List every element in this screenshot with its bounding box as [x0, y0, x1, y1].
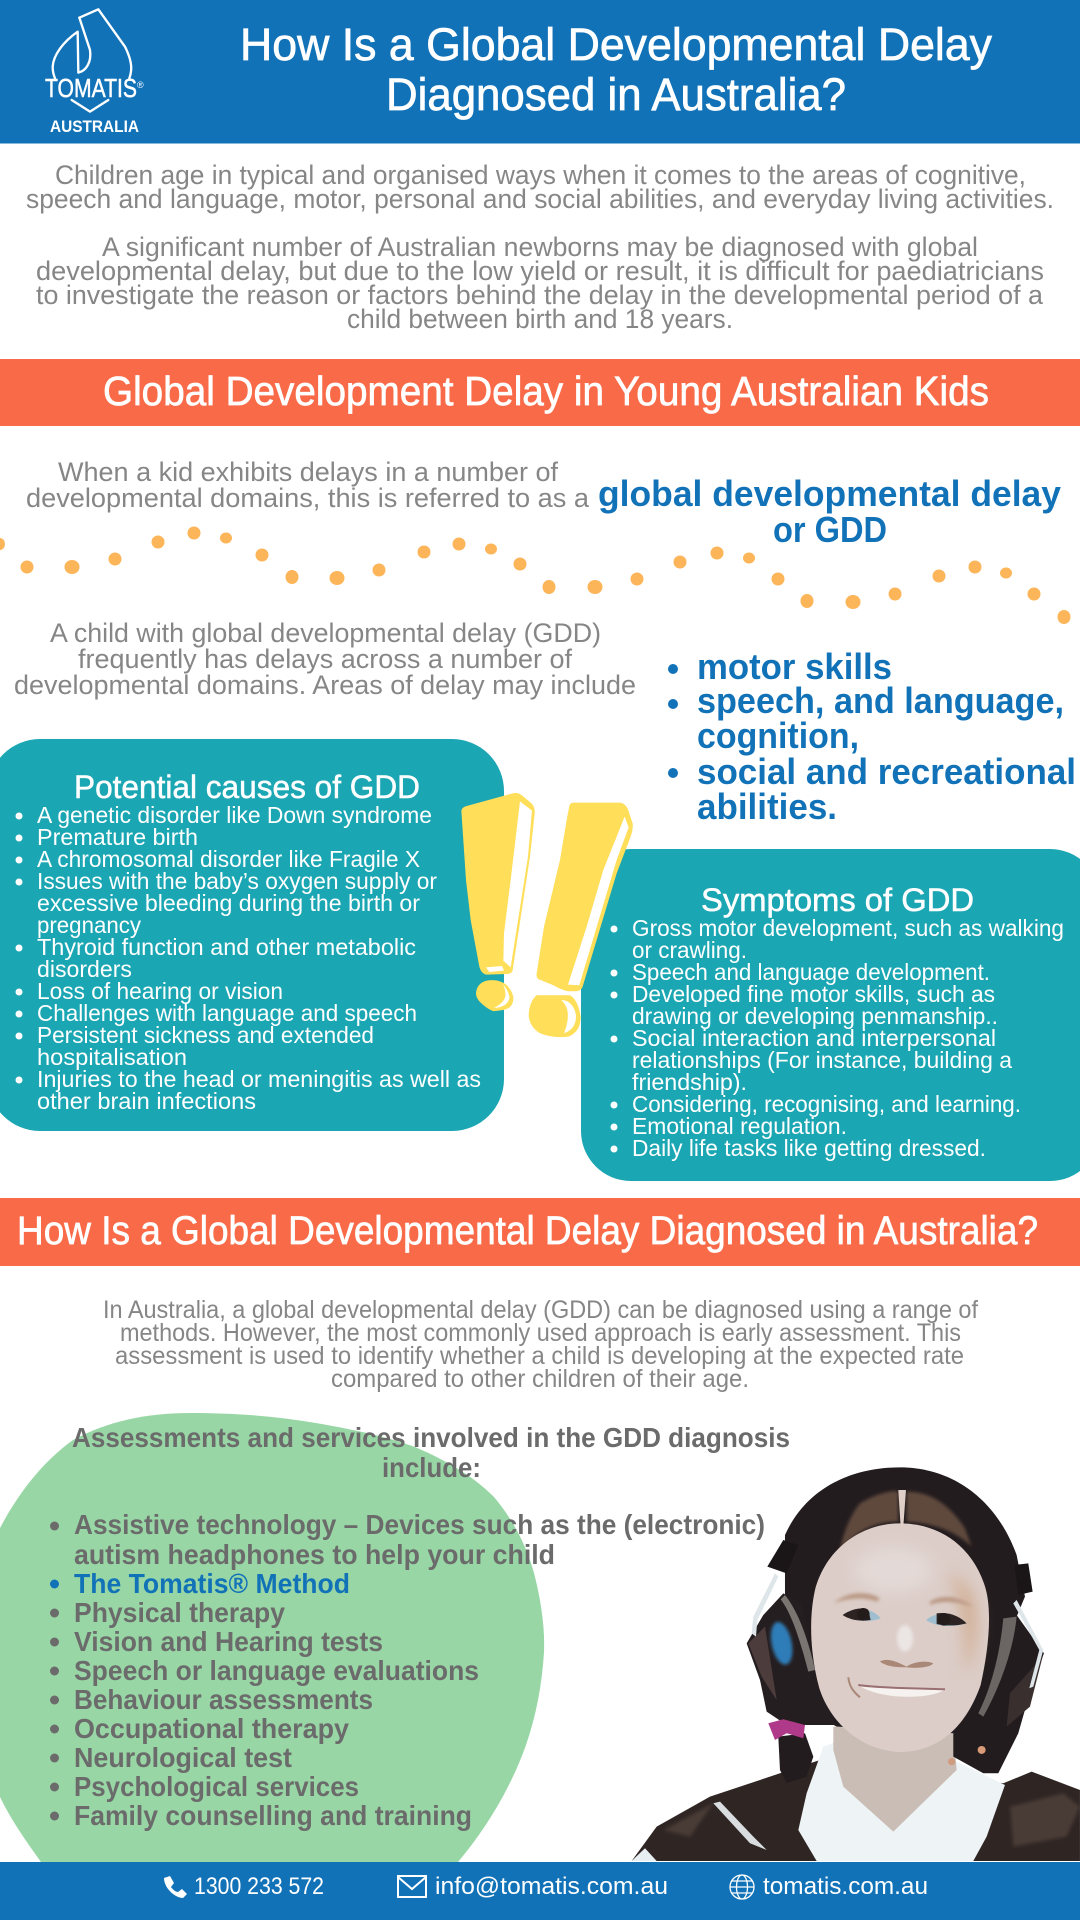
intro paragraph 2: developmental delay, but due to the low yield or result, it is difficult for paediatricians: [36, 256, 1044, 286]
face: [811, 1523, 989, 1752]
hair parting: [898, 1490, 906, 1527]
icon: double exclamation marks: [461, 790, 633, 1050]
text: diagnosis paragraph: methods. However, the most commonly used approach is early assessment. This: [120, 1319, 961, 1347]
header band: [0, 0, 1080, 144]
panel: symptoms of GDD: [581, 849, 1080, 1181]
list: symptoms: Social interaction and interpersonal: [632, 1025, 996, 1051]
icon: globe: [730, 1875, 754, 1899]
list: causes: Thyroid function and other metabolic: [37, 934, 416, 960]
list: assessments: Neurological test: [74, 1742, 292, 1773]
list: symptoms: Gross motor development, such as walking: [632, 915, 1064, 941]
list: causes: A chromosomal disorder like Fragile X: [37, 846, 420, 872]
right eye: [926, 1614, 967, 1626]
list: symptoms: [610, 915, 1064, 1161]
neck: [833, 1727, 957, 1832]
list: assessments: Assistive technology – Devices such as the (electronic): [74, 1509, 765, 1540]
heading: symptoms: Symptoms of GDD: [701, 882, 974, 918]
list: symptoms: friendship).: [632, 1069, 747, 1095]
list: causes: hospitalisation: [37, 1044, 187, 1070]
text: areas of delay: [14, 618, 636, 700]
hair and headband mass: [785, 1467, 1025, 1733]
list: assessments: Occupational therapy: [74, 1713, 349, 1744]
heading: assessments and services: Assessments and services involved in the GDD diagnosis: [72, 1422, 790, 1453]
list: assessments: [50, 1509, 765, 1831]
footer band: [0, 1862, 1080, 1920]
headband sliders and wire: [752, 1573, 1043, 1688]
logo: Tomatis Australia: [45, 9, 144, 136]
icon: phone: [164, 1876, 187, 1898]
left bar: [461, 793, 535, 975]
intro paragraph 1: speech and language, motor, personal and social abilities, and everyday living activities.: [26, 184, 1054, 214]
list: developmental domains: abilities.: [697, 786, 837, 827]
left eye: [843, 1609, 881, 1621]
title: How Is a Global Developmental Delay: [240, 19, 992, 70]
headband clips: [767, 1540, 1033, 1595]
right dot: [529, 995, 581, 1037]
list: causes: Loss of hearing or vision: [37, 978, 283, 1004]
list: symptoms: Daily life tasks like getting dressed.: [632, 1135, 986, 1161]
list: causes: [16, 802, 481, 1114]
hair beads: [978, 1746, 986, 1754]
right bar: [537, 803, 633, 991]
list: assessments: Physical therapy: [74, 1597, 285, 1628]
green blob background: [0, 1413, 544, 1862]
list: causes: A genetic disorder like Down syndrome: [37, 802, 432, 828]
intro paragraph 1: Children age in typical and organised ways when it comes to the areas of cognitive,: [55, 160, 1026, 190]
list: assessments: Psychological services: [74, 1771, 359, 1802]
list: symptoms: Developed fine motor skills, such as: [632, 981, 995, 1007]
cardigan: [632, 1760, 1080, 1861]
list: causes: Premature birth: [37, 824, 198, 850]
list: developmental domains: motor skills: [697, 646, 892, 687]
list: causes: other brain infections: [37, 1088, 256, 1114]
title: Diagnosed in Australia?: [386, 69, 846, 120]
list: causes: disorders: [37, 956, 132, 982]
text: definition of GDD: [26, 457, 590, 513]
list: assessments: Behaviour assessments: [74, 1684, 373, 1715]
intro paragraph 2: A significant number of Australian newborns may be diagnosed with global: [102, 232, 978, 262]
shirt: [798, 1742, 1005, 1861]
eyebrows: [833, 1593, 973, 1607]
highlight: global developmental delay or GDD: [598, 473, 1061, 550]
list: symptoms: Considering, recognising, and learning.: [632, 1091, 1021, 1117]
face shading: [853, 1547, 977, 1673]
text: definition of GDD: When a kid exhibits delays in a number of: [58, 457, 558, 487]
contact: phone: 1300 233 572: [194, 1873, 324, 1900]
text: areas of delay: A child with global developmental delay (GDD): [50, 618, 601, 648]
list: causes: Challenges with language and speech: [37, 1000, 417, 1026]
heading: assessments and services: include:: [382, 1452, 481, 1483]
left braid: [778, 1733, 813, 1783]
mouth: [858, 1685, 945, 1697]
logo: Tomatis Australia: ®: [137, 80, 144, 90]
text: definition of GDD: developmental domains, this is referred to as a: [26, 483, 590, 513]
list: assessments: Family counselling and training: [74, 1800, 472, 1831]
list: assessments: autism headphones to help your child: [74, 1539, 555, 1570]
text: diagnosis paragraph: compared to other children of their age.: [331, 1365, 749, 1393]
logo: Tomatis Australia: AUSTRALIA: [50, 117, 139, 136]
section heading: Global Development Delay in Young Australian Kids: [0, 359, 1080, 426]
list: developmental domains: social and recreational: [697, 751, 1076, 792]
text: areas of delay: frequently has delays across a number of: [78, 644, 572, 674]
list: symptoms: relationships (For instance, building a: [632, 1047, 1012, 1073]
text: diagnosis paragraph: [103, 1296, 978, 1393]
contact: website: tomatis.com.au: [763, 1873, 928, 1900]
list: causes: pregnancy: [37, 912, 141, 938]
brown hair highlights: [840, 1491, 972, 1550]
left headphone cup: [747, 1593, 835, 1725]
list: causes: Issues with the baby’s oxygen supply or: [37, 868, 437, 894]
icon: envelope: [398, 1876, 426, 1897]
list: causes: Injuries to the head or meningitis as well as: [37, 1066, 481, 1092]
contact: email: info@tomatis.com.au: [435, 1873, 668, 1900]
list: symptoms: Emotional regulation.: [632, 1113, 847, 1139]
panel: potential causes of GDD: [0, 739, 504, 1131]
list: causes: excessive bleeding during the birth or: [37, 890, 420, 916]
title: [240, 19, 992, 120]
left dot: [476, 980, 513, 1011]
text: areas of delay: developmental domains. Areas of delay may include: [14, 670, 636, 700]
list: developmental domains: cognition,: [697, 715, 859, 756]
list: symptoms: Speech and language development.: [632, 959, 990, 985]
section heading: How Is a Global Developmental Delay Diagnosed in Australia?: [0, 1198, 1080, 1266]
intro paragraph 1: [26, 160, 1054, 214]
list: symptoms: drawing or developing penmanship..: [632, 1003, 998, 1029]
list: assessments: Vision and Hearing tests: [74, 1626, 383, 1657]
highlight: global developmental delay or GDD: or GDD: [773, 509, 887, 550]
right headphone cup: [953, 1615, 1044, 1773]
text: diagnosis paragraph: assessment is used to identify whether a child is developing at the expected rate: [115, 1342, 964, 1370]
list: developmental domains: [668, 646, 1076, 827]
heading: potential causes: Potential causes of GDD: [74, 769, 420, 805]
dotted wave decoration: [0, 526, 1070, 624]
highlight: global developmental delay or GDD: global developmental delay: [598, 473, 1061, 514]
pink hair tie: [768, 1719, 805, 1740]
list: developmental domains: speech, and language,: [697, 680, 1064, 721]
intro paragraph 2: [36, 232, 1044, 334]
illustration: smiling girl wearing headphones: [632, 1467, 1080, 1861]
heading: assessments and services: [72, 1422, 790, 1483]
logo: Tomatis Australia: TOMATIS: [45, 73, 137, 103]
list: causes: Persistent sickness and extended: [37, 1022, 374, 1048]
list: symptoms: or crawling.: [632, 937, 747, 963]
list: assessments: The Tomatis® Method: [74, 1568, 350, 1599]
intro paragraph 2: child between birth and 18 years.: [347, 304, 733, 334]
text: diagnosis paragraph: In Australia, a global developmental delay (GDD) can be diagnosed using a range of: [103, 1296, 978, 1324]
intro paragraph 2: to investigate the reason or factors behind the delay in the developmental period of a: [36, 280, 1044, 310]
section heading: Global Development Delay in Young Australian Kids: Global Development Delay in Young Australian Kids: [103, 368, 989, 414]
list: assessments: Speech or language evaluations: [74, 1655, 479, 1686]
nose: [897, 1625, 913, 1652]
